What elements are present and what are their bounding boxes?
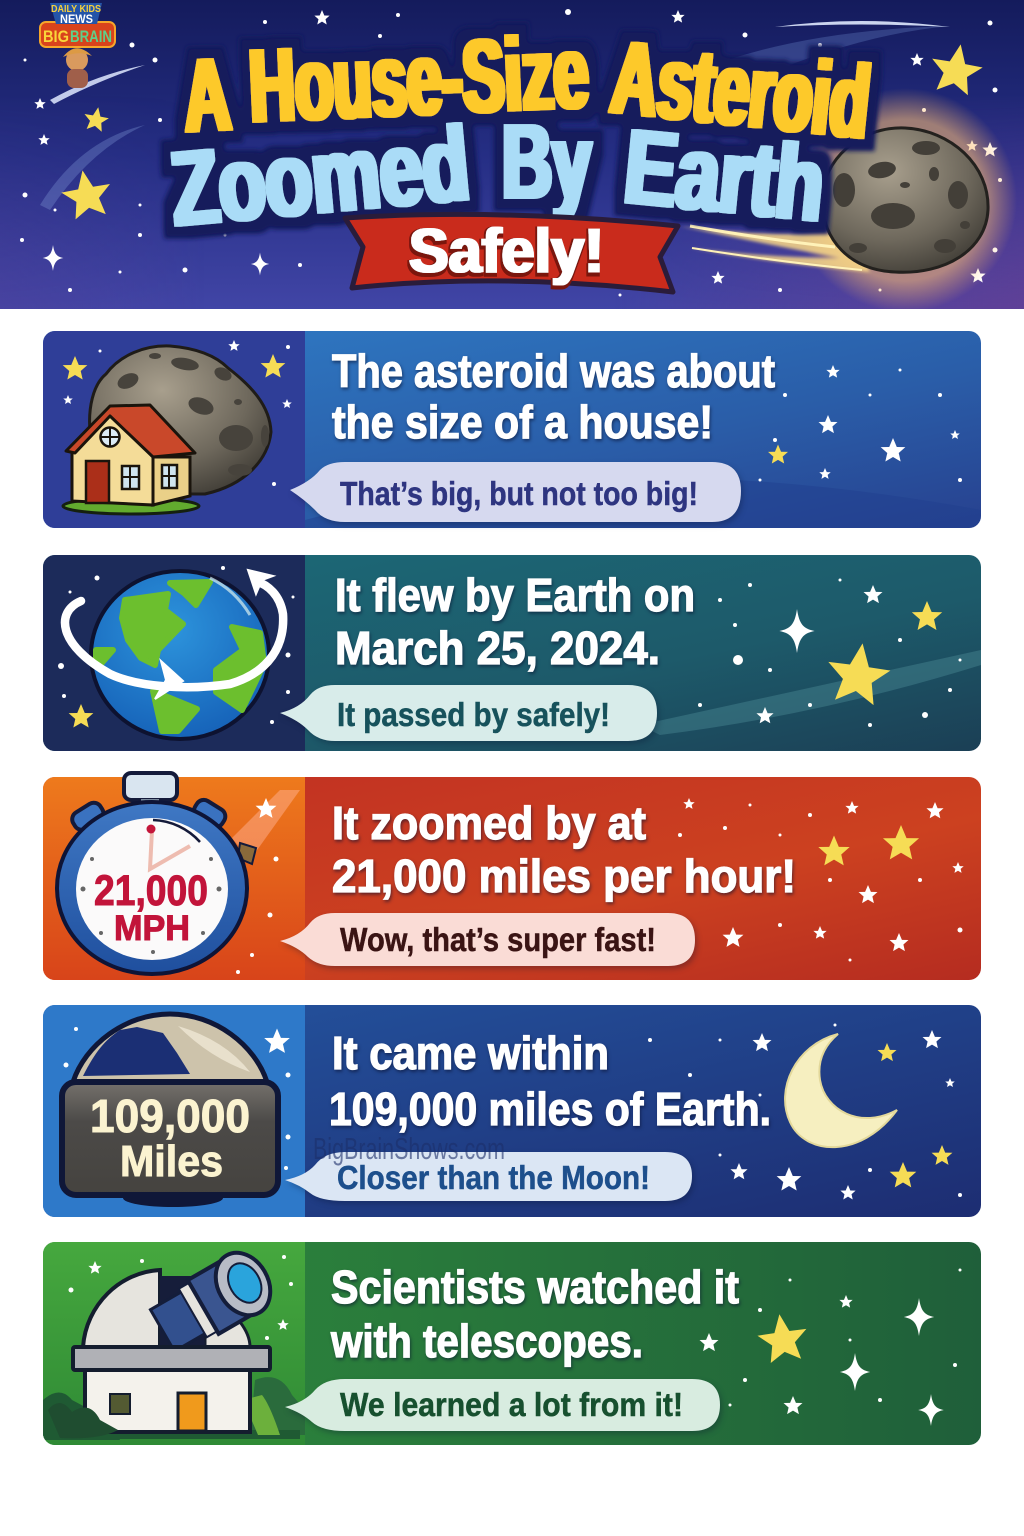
text: fly-by date: It flew by Earth on <box>335 569 695 621</box>
watermark: BigBrainShows.com <box>313 1131 505 1166</box>
title: By <box>502 103 591 221</box>
callout: asteroid size: That’s big, but not too big! <box>340 475 698 512</box>
text: speed: It zoomed by at <box>332 797 646 849</box>
icon: dome and 109,000 Miles plaque: Miles <box>120 1137 223 1186</box>
ribbon: Safely! <box>345 214 678 292</box>
icon: header asteroid with trail <box>680 88 1017 312</box>
title: House-Size <box>247 14 591 145</box>
icon: crescent moon <box>785 1034 897 1147</box>
text: distance: It came within <box>332 1027 609 1079</box>
text: fly-by date: March 25, 2024. <box>335 622 660 674</box>
callout: telescopes: We learned a lot from it! <box>340 1386 683 1423</box>
logo: Daily Kids News Big Brain: BIG <box>43 27 69 46</box>
text: speed: 21,000 miles per hour! <box>332 850 796 902</box>
icon: observatory and telescope <box>43 1243 305 1440</box>
callout: speed <box>280 913 695 966</box>
text: fly-by date <box>335 569 695 674</box>
icon: dome and 109,000 Miles plaque <box>62 1014 278 1207</box>
callout: telescopes <box>285 1379 720 1431</box>
callout: asteroid size <box>290 462 741 522</box>
title: Earth <box>620 107 829 244</box>
header banner <box>0 0 1024 309</box>
title: A <box>181 37 233 155</box>
panel: asteroid size <box>43 331 981 528</box>
panel: speed <box>43 777 981 980</box>
callout: distance <box>285 1152 692 1201</box>
ribbon: Safely!: Safely! <box>409 217 604 286</box>
logo: Daily Kids News Big Brain: DAILY KIDS <box>51 4 101 15</box>
logo: Daily Kids News Big Brain <box>40 3 115 88</box>
text: asteroid size: The asteroid was about <box>332 345 775 397</box>
text: asteroid size <box>332 345 775 448</box>
text: speed <box>332 797 796 902</box>
icon: Earth with orbit arrow <box>65 570 283 739</box>
logo: Daily Kids News Big Brain: NEWS <box>60 12 93 26</box>
icon: asteroid behind house <box>63 346 271 514</box>
text: telescopes: with telescopes. <box>330 1315 643 1367</box>
text: distance: 109,000 miles of Earth. <box>329 1083 771 1135</box>
panel: fly-by date <box>43 555 981 751</box>
callout: distance: Closer than the Moon! <box>337 1159 650 1196</box>
icon: stopwatch 21,000 MPH: 21,000 <box>94 867 208 915</box>
text: distance <box>329 1027 771 1135</box>
logo: Daily Kids News Big Brain: BRAIN <box>70 27 112 46</box>
title <box>166 14 875 249</box>
text: telescopes: Scientists watched it <box>331 1261 739 1313</box>
text: asteroid size: the size of a house! <box>332 396 713 448</box>
text: telescopes <box>330 1261 739 1367</box>
panel: distance <box>43 1005 981 1217</box>
panel: telescopes <box>43 1242 981 1445</box>
icon: header stars <box>58 40 986 221</box>
icon: stopwatch 21,000 MPH <box>57 773 256 974</box>
callout: fly-by date: It passed by safely! <box>337 696 610 733</box>
callout: speed: Wow, that’s super fast! <box>340 921 656 958</box>
title: Zoomed <box>166 104 474 249</box>
callout: fly-by date <box>280 685 657 741</box>
icon: dome and 109,000 Miles plaque: 109,000 <box>90 1090 250 1142</box>
icon: stopwatch 21,000 MPH: MPH <box>114 909 190 948</box>
